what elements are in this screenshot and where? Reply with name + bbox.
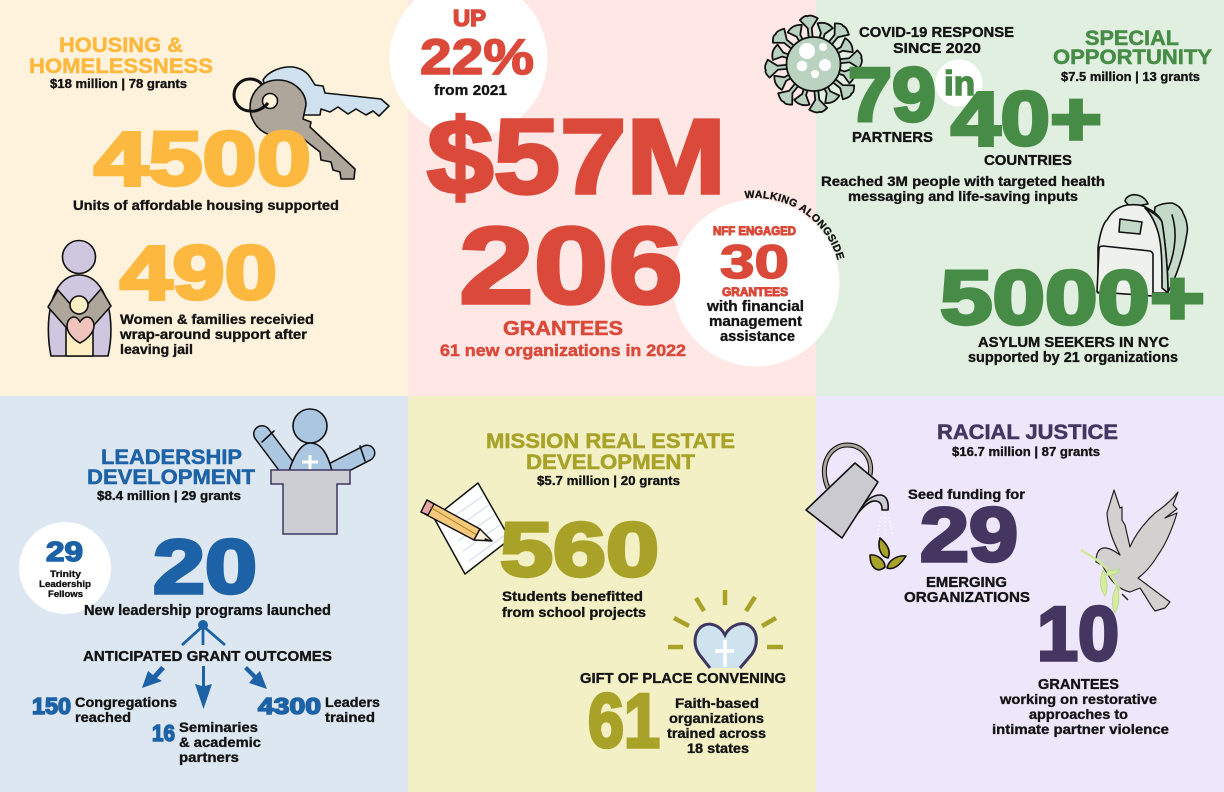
heading: mission real estate: MISSION REAL ESTATE xyxy=(486,430,735,453)
stat: 150 congregations: reached xyxy=(75,710,131,726)
callout: NFF engaged: GRANTEES xyxy=(722,285,788,299)
stat: 79 partners: PARTNERS xyxy=(852,130,933,146)
heading: mission real estate xyxy=(486,430,735,488)
callout: trinity fellows: 29 xyxy=(46,536,83,567)
callout: NFF engaged: NFF ENGAGED xyxy=(713,224,796,238)
icon: mother and child xyxy=(48,240,111,356)
icon: coronavirus xyxy=(764,15,863,113)
text: reached 3M: messaging and life-saving inputs xyxy=(848,189,1078,205)
label: asylum seekers: ASYLUM SEEKERS IN NYC xyxy=(978,335,1170,351)
heading: housing: $18 million | 78 grants xyxy=(50,77,187,91)
stat: 4300 leaders: trained xyxy=(325,710,375,726)
label: asylum seekers xyxy=(968,335,1178,366)
panel background: housing xyxy=(0,0,408,396)
callout: up 22 percent: 22% xyxy=(420,29,534,85)
stat: 490: 490 xyxy=(120,231,277,316)
callout: trinity fellows xyxy=(19,522,111,614)
panel: racial justice xyxy=(806,421,1178,738)
heading: special opportunity: $7.5 million | 13 grants xyxy=(1061,70,1200,84)
stat: 4300 leaders: 4300 xyxy=(258,693,321,719)
stat: 10: 10 xyxy=(1037,592,1119,677)
heading: special opportunity: SPECIAL xyxy=(1085,27,1179,50)
stat: 16 seminaries: Seminaries xyxy=(179,720,258,736)
heading: mission real estate: $5.7 million | 20 grants xyxy=(537,474,680,488)
callout: NFF engaged: management xyxy=(709,314,802,330)
stat: 20: 20 xyxy=(153,525,257,610)
label: grantees: GRANTEES xyxy=(503,318,623,340)
panel: total grants xyxy=(390,0,844,366)
label: emerging organizations: EMERGING xyxy=(926,575,1007,591)
stat: 16 seminaries xyxy=(152,720,261,766)
label: restorative approaches xyxy=(992,677,1169,738)
stat: 16 seminaries: & academic xyxy=(179,735,261,751)
heading: special opportunity: OPPORTUNITY xyxy=(1053,46,1212,69)
stat: 150 congregations: Congregations xyxy=(75,695,177,711)
label: faith-based xyxy=(667,696,766,757)
heading: mission real estate: DEVELOPMENT xyxy=(526,451,695,474)
callout: NFF engaged: with financial xyxy=(706,299,804,315)
stat: 5000+: 5000+ xyxy=(940,256,1205,341)
heading: gift of place: GIFT OF PLACE CONVENING xyxy=(580,671,786,687)
label: women and families: leaving jail xyxy=(120,341,193,357)
label: women and families: Women & families receivied xyxy=(120,311,314,327)
stat: 150 congregations xyxy=(32,693,177,726)
callout: up 22 percent xyxy=(390,0,548,137)
stat: 61: 61 xyxy=(588,679,660,764)
icon: radiant heart with cross xyxy=(668,590,783,668)
label: restorative approaches: intimate partner violence xyxy=(992,722,1169,738)
panel background: mission real estate xyxy=(408,396,816,792)
callout: trinity fellows: Leadership xyxy=(39,579,91,590)
callout: trinity fellows: Trinity xyxy=(50,569,82,580)
heading: leadership development: LEADERSHIP xyxy=(101,446,242,469)
diagram: branch from programs xyxy=(182,620,225,645)
label: new programs: New leadership programs launched xyxy=(84,603,331,619)
callout: NFF engaged xyxy=(674,190,844,366)
heading: covid response xyxy=(859,25,1014,57)
heading: racial justice xyxy=(937,421,1118,459)
label: faith-based: trained across xyxy=(667,726,766,742)
callout: up 22 percent: from 2021 xyxy=(434,82,507,99)
stat: 4300 leaders xyxy=(258,693,380,726)
icon: watering can xyxy=(806,445,906,570)
panel: special opportunity xyxy=(764,15,1212,366)
callout: NFF engaged: WALKING ALONGSIDE xyxy=(744,190,844,260)
arrow: centre xyxy=(195,666,212,709)
stat: 16 seminaries: 16 xyxy=(152,720,175,746)
label: students xyxy=(502,589,646,621)
stat: 4300 leaders: Leaders xyxy=(325,695,380,711)
heading: leadership development: DEVELOPMENT xyxy=(87,466,255,489)
stat: 40+ countries: COUNTRIES xyxy=(984,153,1072,169)
heading: leadership development xyxy=(87,446,255,503)
icon: preacher at pulpit xyxy=(262,409,367,534)
icon: keys xyxy=(234,67,389,179)
panel background: special opportunity xyxy=(816,0,1224,396)
stat: 79 partners: 79 xyxy=(848,53,936,138)
label: emerging organizations: ORGANIZATIONS xyxy=(904,590,1030,606)
panel: housing and homelessness xyxy=(29,34,389,357)
stat: 4500: 4500 xyxy=(94,117,311,202)
label: restorative approaches: working on restorative xyxy=(999,692,1157,708)
callout: in xyxy=(936,60,982,106)
label: asylum seekers: supported by 21 organizations xyxy=(968,350,1178,366)
label: faith-based: Faith-based xyxy=(675,696,759,712)
label: students: Students benefitted xyxy=(502,589,643,605)
heading: racial justice: $16.7 million | 87 grants xyxy=(952,445,1100,459)
label: women and families xyxy=(119,311,314,357)
heading: leadership development: $8.4 million | 29 grants xyxy=(97,489,241,503)
label: restorative approaches: GRANTEES xyxy=(1038,677,1119,693)
stat: 150 congregations: 150 xyxy=(32,693,71,719)
heading: housing xyxy=(29,34,213,91)
panel: leadership development xyxy=(19,409,380,766)
label: grantees: 61 new organizations in 2022 xyxy=(440,341,686,360)
stat: 206: 206 xyxy=(459,205,683,327)
panel background: leadership development xyxy=(0,396,408,792)
panel: mission real estate development xyxy=(421,430,786,764)
heading: special opportunity xyxy=(1053,27,1212,84)
label: seed funding: Seed funding for xyxy=(908,487,1025,503)
stat: 40+ countries: 40+ xyxy=(951,77,1102,162)
heading: housing: HOMELESSNESS xyxy=(29,55,213,78)
callout: NFF engaged: 30 xyxy=(720,235,789,288)
callout: in: in xyxy=(944,65,975,103)
label: faith-based: organizations xyxy=(669,711,764,727)
label: units: Units of affordable housing supported xyxy=(73,198,339,214)
heading: covid response: COVID-19 RESPONSE xyxy=(859,25,1014,41)
icon: paper and pencil xyxy=(421,483,510,574)
label: grantees xyxy=(440,318,686,360)
arrow: left xyxy=(142,666,165,688)
panel background: total grants xyxy=(408,0,816,396)
stat: 16 seminaries: partners xyxy=(179,750,239,766)
heading: racial justice: RACIAL JUSTICE xyxy=(937,421,1118,444)
heading: covid response: SINCE 2020 xyxy=(893,41,981,57)
label: students: from school projects xyxy=(502,605,646,621)
stat: 560: 560 xyxy=(500,508,659,593)
icon: dove with olive branch xyxy=(1081,490,1178,613)
callout: up 22 percent: UP xyxy=(453,5,486,31)
label: emerging organizations xyxy=(904,575,1030,606)
stat: $57M: $57M xyxy=(427,98,726,216)
panel background: racial justice xyxy=(816,396,1224,792)
heading: housing: HOUSING & xyxy=(59,34,183,57)
label: restorative approaches: approaches to xyxy=(1029,707,1128,723)
icon: backpack xyxy=(1097,195,1187,296)
callout: NFF engaged: assistance xyxy=(720,329,795,345)
stat: 29: 29 xyxy=(920,493,1018,578)
heading: anticipated outcomes: ANTICIPATED GRANT OUTCOMES xyxy=(83,649,332,665)
arrow: right xyxy=(244,666,267,689)
text: reached 3M: Reached 3M people with targeted health xyxy=(821,174,1105,190)
label: women and families: wrap-around support after xyxy=(119,326,308,342)
callout: trinity fellows: Fellows xyxy=(48,589,83,600)
text: reached 3M xyxy=(821,174,1105,205)
label: faith-based: 18 states xyxy=(687,741,749,757)
